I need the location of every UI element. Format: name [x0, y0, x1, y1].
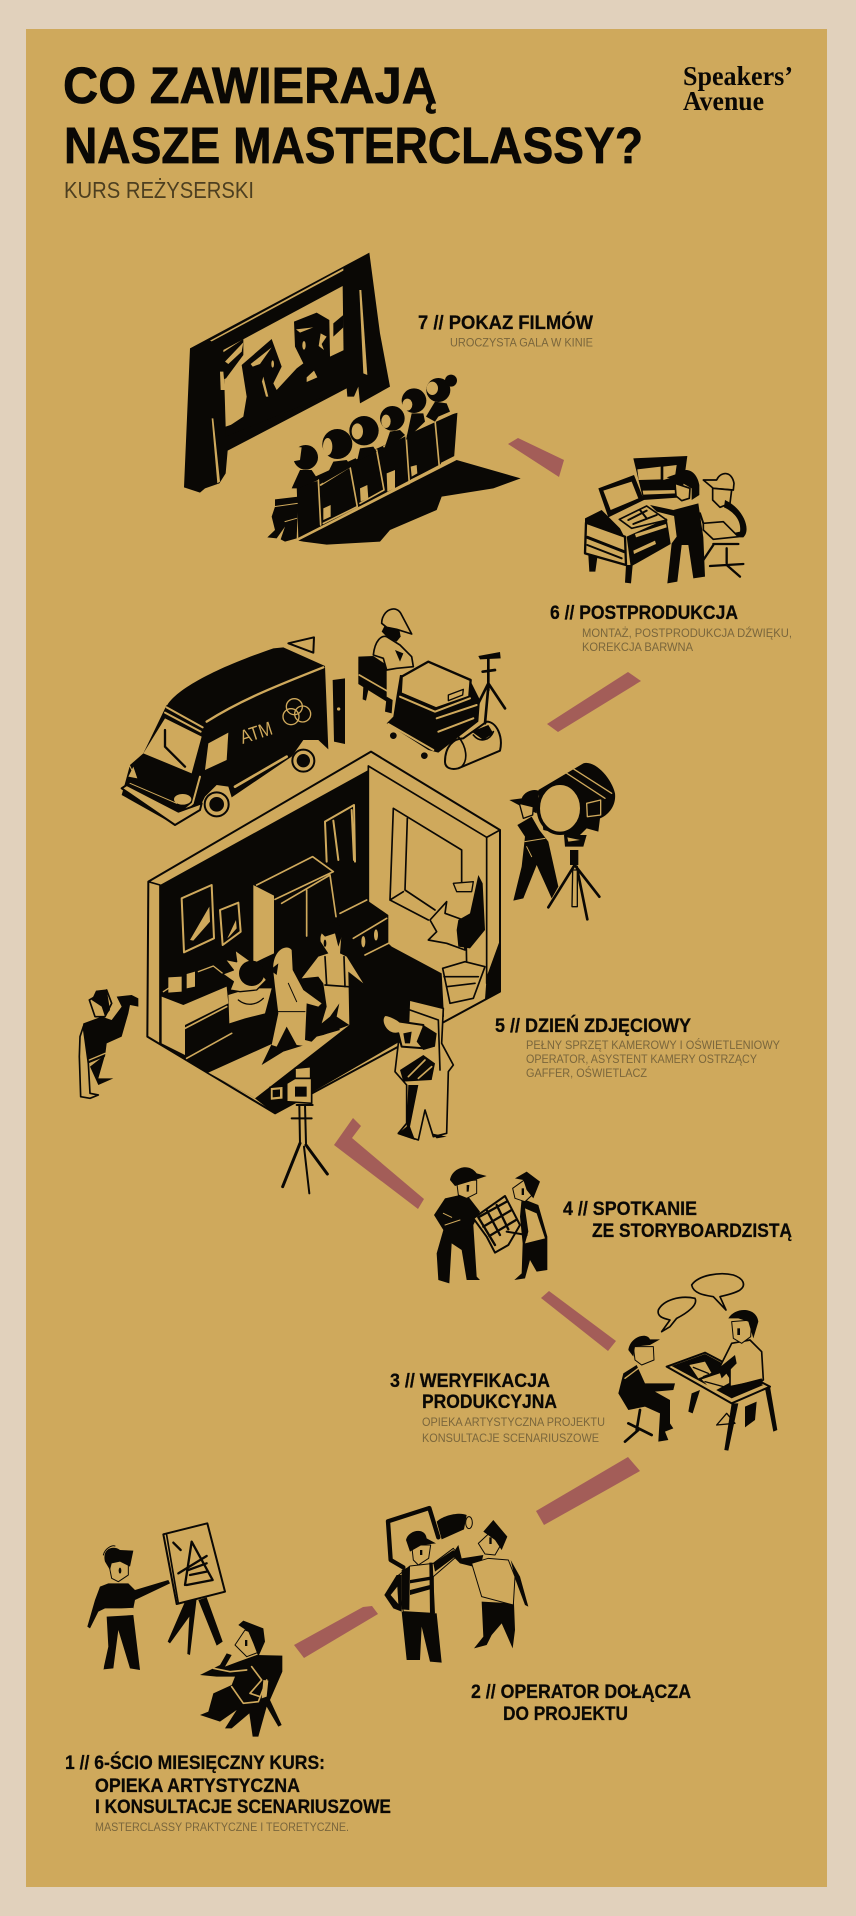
illustration: storyboard meeting	[434, 1167, 547, 1283]
heading: step 5: PEŁNY SPRZĘT KAMEROWY I OŚWIETLENIOWY	[526, 1039, 780, 1052]
arrow: step 5 to 4	[334, 1118, 424, 1209]
arrow: step 3 to 2	[536, 1457, 640, 1525]
icon: tripod camera	[270, 1067, 327, 1193]
title	[63, 57, 643, 174]
illustration: cinema screen and audience	[184, 253, 521, 545]
heading: step 7: UROCZYSTA GALA W KINIE	[450, 338, 593, 350]
illustration: gaffer with spotlight	[509, 763, 615, 919]
heading: step 7	[418, 310, 594, 350]
heading: step 3: PRODUKCYJNA	[422, 1391, 557, 1413]
heading: step 7: 7 // POKAZ FILMÓW	[418, 310, 594, 334]
heading: step 5: OPERATOR, ASYSTENT KAMERY OSTRZĄCY	[526, 1054, 757, 1066]
illustration: production van and gear: ATM	[238, 719, 275, 749]
heading: step 5: GAFFER, OŚWIETLACZ	[526, 1067, 647, 1080]
heading: step 4: ZE STORYBOARDZISTĄ	[592, 1220, 792, 1242]
illustration: film set room	[79, 752, 500, 1193]
illustration: teacher at easel and student	[87, 1523, 282, 1737]
illustration: production van and gear	[122, 609, 505, 825]
icon: cameraman	[383, 1000, 453, 1140]
heading: step 6: KOREKCJA BARWNA	[582, 642, 693, 654]
title: CO ZAWIERAJĄ	[63, 57, 437, 114]
heading: step 2	[471, 1681, 691, 1725]
illustration: operator joins, high five	[384, 1508, 528, 1663]
heading: step 6: MONTAŻ, POSTPRODUKCJA DŹWIĘKU,	[582, 627, 792, 640]
heading: step 4: 4 // SPOTKANIE	[563, 1198, 697, 1220]
logo: Speakers' Avenue	[683, 61, 793, 116]
heading: step 3	[390, 1370, 605, 1445]
heading: step 6: 6 // POSTPRODUKCJA	[550, 602, 738, 624]
heading: step 4	[563, 1198, 792, 1242]
title: NASZE MASTERCLASSY?	[64, 117, 643, 174]
heading: step 1: OPIEKA ARTYSTYCZNA	[95, 1775, 300, 1797]
heading: step 2: 2 // OPERATOR DOŁĄCZA	[471, 1681, 691, 1703]
heading: step 5: 5 // DZIEŃ ZDJĘCIOWY	[495, 1014, 691, 1037]
illustration: production verification	[618, 1274, 777, 1451]
illustration: postproduction desk	[585, 456, 747, 583]
heading: step 1: 1 // 6-ŚCIO MIESIĘCZNY KURS:	[65, 1750, 325, 1774]
logo: Speakers' Avenue: Speakers’	[683, 61, 793, 91]
heading: step 1: MASTERCLASSY PRAKTYCZNE I TEORETYCZNE.	[95, 1822, 349, 1834]
icon: photographer	[79, 989, 138, 1098]
heading: step 1	[65, 1750, 391, 1834]
heading: step 6	[550, 602, 792, 654]
heading: step 3: OPIEKA ARTYSTYCZNA PROJEKTU	[422, 1417, 605, 1429]
arrow: step 2 to 1	[294, 1606, 378, 1658]
heading: step 2: DO PROJEKTU	[503, 1703, 628, 1725]
heading: step 3: KONSULTACJE SCENARIUSZOWE	[422, 1433, 599, 1445]
heading: step 1: I KONSULTACJE SCENARIUSZOWE	[95, 1796, 391, 1818]
heading: step 3: 3 // WERYFIKACJA	[390, 1370, 550, 1392]
logo: Speakers' Avenue: Avenue	[683, 86, 764, 116]
heading: step 5	[495, 1014, 780, 1080]
subtitle: KURS REŻYSERSKI	[64, 177, 254, 203]
arrow: step 7 to 6	[508, 438, 564, 477]
arrow: step 6 to 5	[547, 672, 641, 732]
arrow: step 4 to 3	[541, 1291, 616, 1351]
